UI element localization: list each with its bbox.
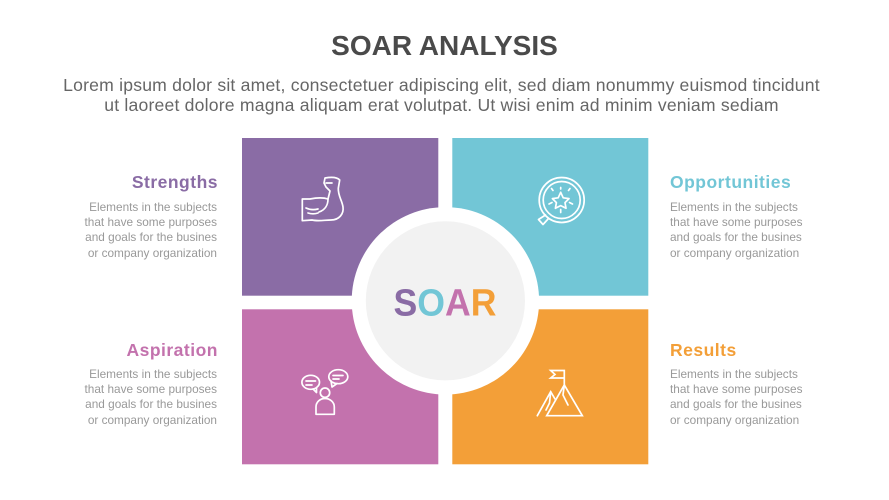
- panel: aspiration: [242, 309, 438, 464]
- description: strengths: and goals for the busines: [85, 230, 217, 244]
- subtitle text: [63, 75, 820, 115]
- heading: strengths: Strengths: [132, 172, 218, 192]
- subtitle text: Lorem ipsum dolor sit amet, consectetuer adipiscing elit, sed diam nonummy euismod tincidunt: [63, 75, 820, 95]
- description: opportunities: or company organization: [670, 246, 799, 260]
- description: aspiration: and goals for the busines: [85, 397, 217, 411]
- description: opportunities: Elements in the subjects: [670, 200, 798, 214]
- description: results: [670, 367, 802, 427]
- description: results: that have some purposes: [670, 382, 802, 396]
- description: strengths: or company organization: [88, 246, 217, 260]
- description: aspiration: or company organization: [88, 413, 217, 427]
- title: SOAR ANALYSIS: [331, 30, 558, 61]
- panel: opportunities: [452, 138, 648, 296]
- description: strengths: that have some purposes: [85, 215, 217, 229]
- icon: flexed arm: [302, 177, 343, 221]
- icon: person with speech bubbles: [302, 370, 348, 414]
- panel: results: [452, 309, 648, 464]
- icon: mountains with flag: [537, 370, 582, 416]
- description: strengths: [84, 200, 217, 260]
- description: aspiration: [84, 367, 217, 427]
- description: opportunities: and goals for the busines: [670, 230, 802, 244]
- description: opportunities: that have some purposes: [670, 215, 802, 229]
- description: strengths: Elements in the subjects: [89, 200, 217, 214]
- heading: aspiration: Aspiration: [126, 340, 218, 360]
- description: results: or company organization: [670, 413, 799, 427]
- description: results: and goals for the busines: [670, 397, 802, 411]
- center label SOAR: SOAR: [394, 282, 496, 324]
- description: aspiration: Elements in the subjects: [89, 367, 217, 381]
- subtitle text: ut laoreet dolore magna aliquam erat volutpat. Ut wisi enim ad minim veniam sediam: [104, 95, 779, 115]
- description: aspiration: that have some purposes: [85, 382, 217, 396]
- icon: star medal: [538, 178, 584, 224]
- center circle: [352, 207, 539, 394]
- description: opportunities: [670, 200, 802, 260]
- heading: opportunities: Opportunities: [670, 172, 791, 192]
- heading: results: Results: [670, 340, 737, 360]
- panel: strengths: [242, 138, 438, 296]
- description: results: Elements in the subjects: [670, 367, 798, 381]
